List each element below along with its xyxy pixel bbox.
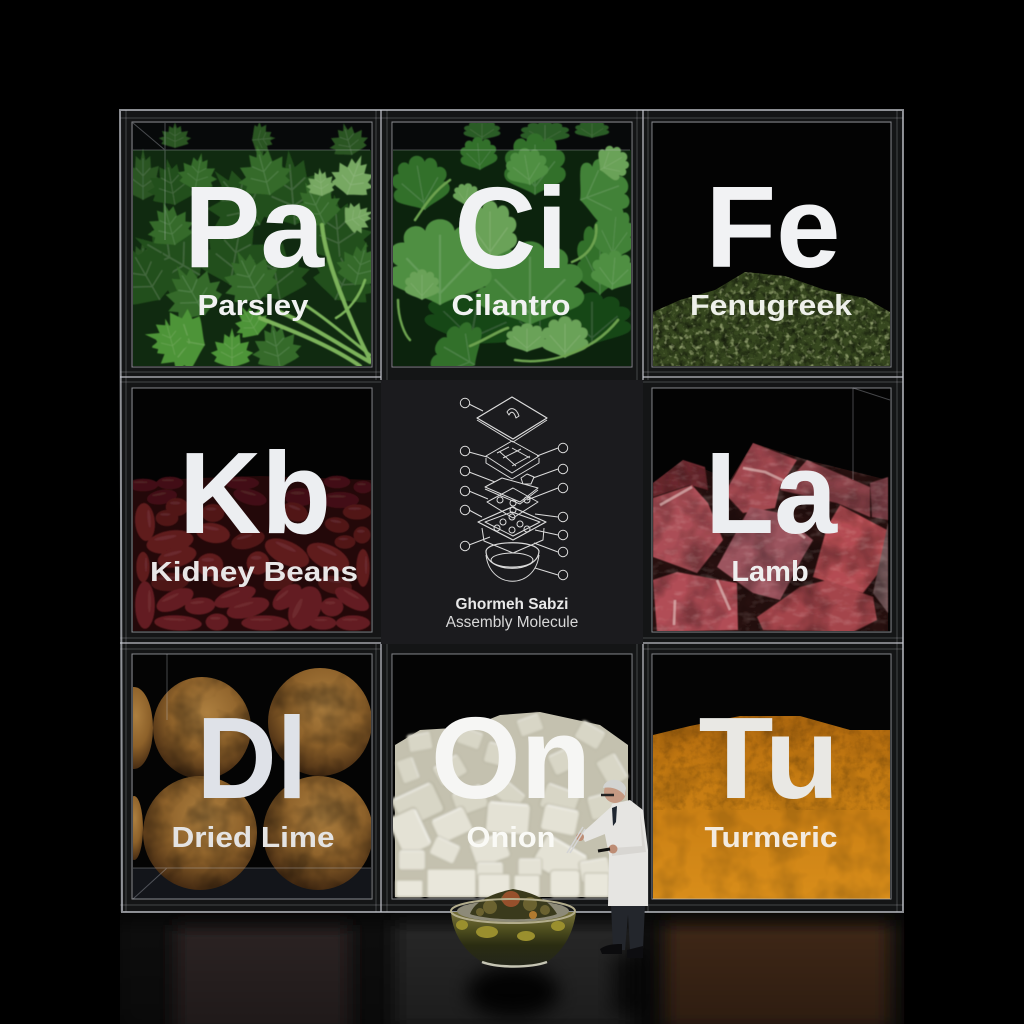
panel: centre assembly diagram [381,380,643,644]
head [601,780,626,803]
name: Turmeric: Turmeric [704,822,838,854]
name: Cilantro: Cilantro [452,290,570,322]
centre card [381,380,643,644]
name: Onion: Onion [466,822,556,854]
figure: bowl of ghormeh sabzi [451,889,576,967]
stew topping [457,889,569,922]
name: Lamb: Lamb [731,556,809,588]
reflective floor [120,905,904,1024]
symbol: Dl: Dl [196,693,308,823]
glass rim [451,899,575,966]
symbol: Fe: Fe [706,162,840,292]
name: Kidney Beans: Kidney Beans [150,556,358,587]
symbol: Ci: Ci [454,163,568,293]
panel: dried lime [133,668,371,899]
ingredient: cilantro leaves [393,123,631,366]
ingredient: turmeric powder [653,716,890,899]
ingredient: kidney beans pile [133,475,371,631]
ingredient: diced onion [393,711,630,899]
name: Fenugreek: Fenugreek [690,290,853,322]
panel: parsley [133,123,371,366]
symbol: On: On [431,693,591,823]
chickpea band [456,920,565,941]
name: Parsley: Parsley [198,290,308,322]
exploded diagram [460,397,568,581]
caption subtitle: Assembly Molecule [446,614,578,631]
name: Dried Lime: Dried Lime [172,822,334,854]
panel: lamb [653,442,889,631]
ingredient: parsley leaves [133,123,371,366]
hands and tweezers [567,827,618,854]
figure: scientist [567,780,648,958]
panel: fenugreek [653,187,890,366]
caption title: Ghormeh Sabzi [456,596,568,613]
lab coat [581,800,648,906]
panel: onion [393,711,630,899]
ingredient: dried limes [133,668,371,899]
panel: turmeric [653,716,890,899]
trousers and shoes [600,904,645,958]
acrylic frame [120,110,903,912]
symbol: Kb: Kb [179,428,331,558]
tie [612,806,617,826]
symbol: Tu: Tu [698,693,840,823]
panel: cilantro [393,123,631,366]
ingredient: fenugreek heap [653,272,890,366]
panel: kidney beans [133,449,371,631]
ingredient: lamb chunks [653,442,889,631]
bowl body [451,912,576,967]
symbol: Pa: Pa [184,162,325,292]
glass frame bands [120,110,903,912]
symbol: La: La [705,428,838,558]
